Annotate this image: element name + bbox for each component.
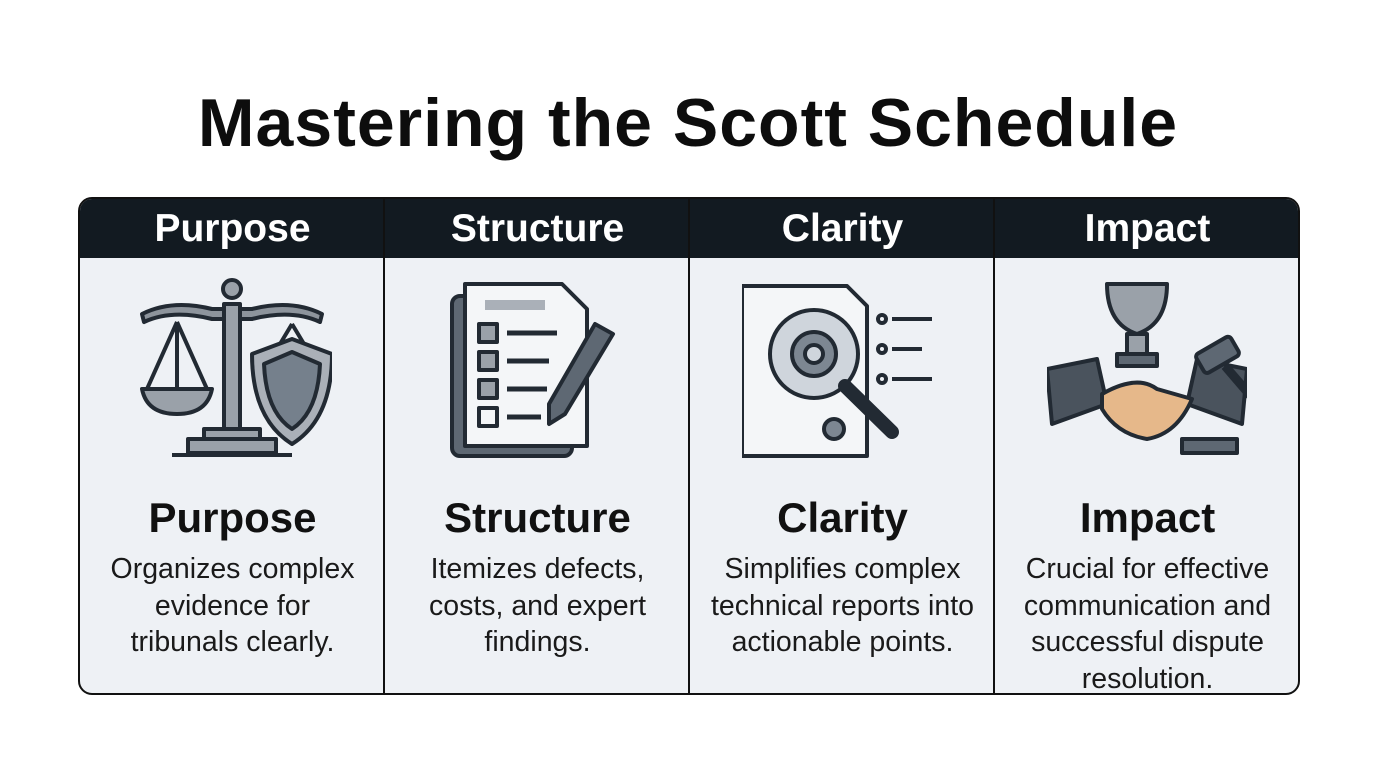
panel: impact: Impact [1080, 494, 1215, 541]
panel: impact: communication and [1024, 590, 1271, 622]
panel: clarity: Simplifies complex [724, 553, 960, 585]
panel: purpose: Purpose [148, 494, 317, 541]
icon: magnifier over report [742, 284, 932, 458]
panel: clarity [711, 207, 974, 658]
icon: checklist document [450, 282, 616, 458]
panel: impact: Impact [1085, 207, 1210, 250]
panel: structure: Structure [444, 494, 631, 541]
panel: purpose [111, 207, 354, 658]
icon: trophy, handshake, gavel [1047, 282, 1247, 455]
panel: purpose: evidence for [155, 590, 310, 622]
panel: impact [1024, 207, 1271, 694]
panel: clarity: technical reports into [711, 590, 974, 622]
panel: structure: costs, and expert [429, 590, 646, 622]
panel: impact: resolution. [1082, 662, 1213, 694]
table [78, 197, 1300, 695]
panel: purpose: Organizes complex [111, 553, 354, 585]
panel: impact: successful dispute [1031, 626, 1264, 658]
panel: impact: Crucial for effective [1026, 553, 1269, 585]
panel: structure: Itemizes defects, [431, 553, 644, 585]
icon: scales and shield [140, 278, 332, 457]
panel: clarity: Clarity [782, 207, 903, 250]
panel: structure [429, 207, 646, 658]
panel: structure: findings. [484, 626, 591, 658]
panel: structure: Structure [451, 207, 624, 250]
panel: purpose: Purpose [154, 207, 311, 250]
panel: clarity: Clarity [777, 494, 908, 541]
panel: purpose: tribunals clearly. [131, 626, 334, 658]
panel: clarity: actionable points. [732, 626, 953, 658]
title: Mastering the Scott Schedule [198, 85, 1178, 161]
